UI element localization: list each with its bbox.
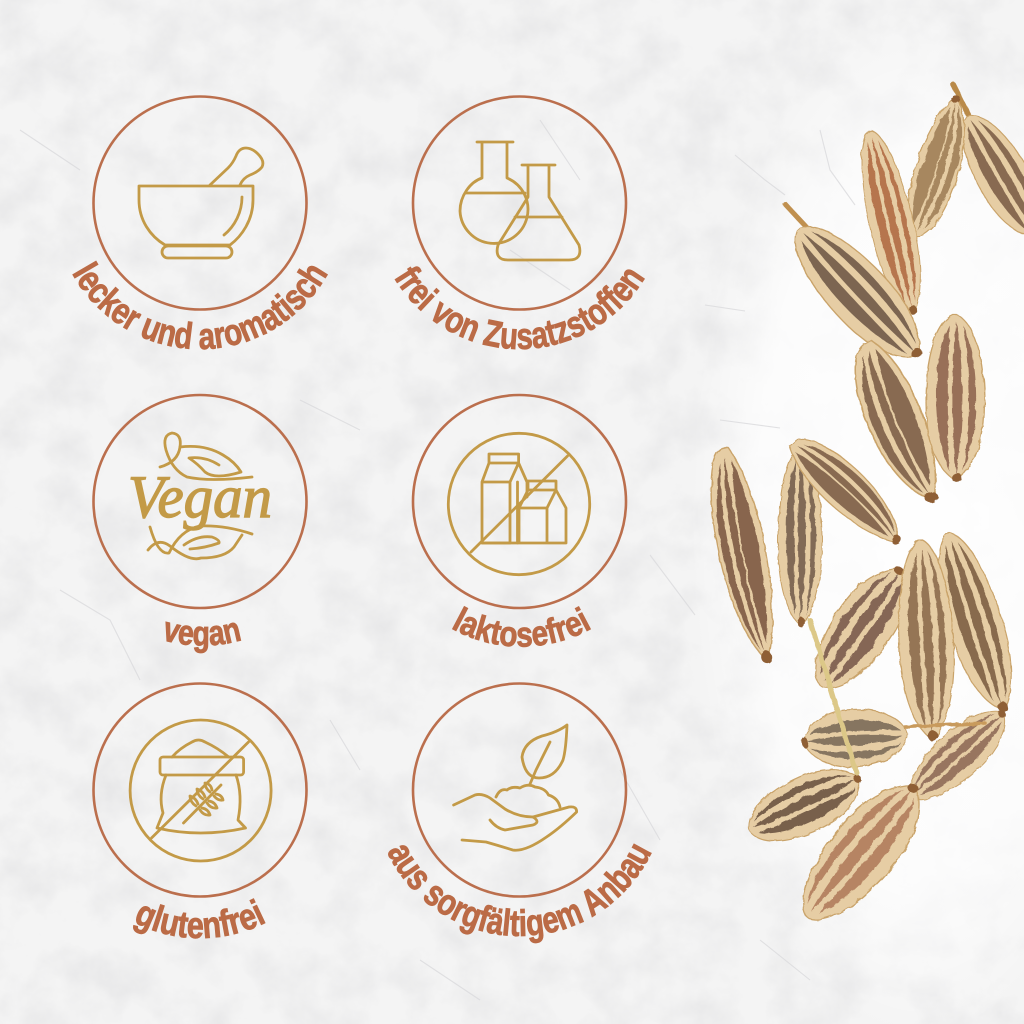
badge: aus sorgfaeltigem Anbau <box>388 682 652 944</box>
illustration: caraway seeds <box>692 84 1024 938</box>
badge: laktosefrei <box>412 394 628 648</box>
seed: middle lower <box>833 335 963 512</box>
label: aus sorgfältigem Anbau <box>388 843 652 944</box>
icon: hand holding seedling <box>454 725 577 850</box>
seed: tall right front <box>894 539 958 743</box>
badge: lecker und aromatisch <box>72 95 328 350</box>
seed: top right <box>946 104 1024 251</box>
label: glutenfrei <box>133 898 266 939</box>
seed: bottom large <box>782 765 942 938</box>
icon: mortar and pestle <box>139 148 263 258</box>
icon: crossed-out flour sack <box>130 720 271 861</box>
circle outline <box>413 395 626 608</box>
icon: vegan lettering with leaves <box>128 433 272 559</box>
badge: frei von Zusatzstoffen <box>394 95 645 350</box>
icon: laboratory flasks <box>460 142 580 260</box>
leaf flourishes <box>148 433 252 559</box>
label: lecker und aromatisch <box>72 260 328 350</box>
seed: upright <box>926 315 984 482</box>
badge: vegan <box>92 394 308 654</box>
seed: centre <box>797 552 927 703</box>
label: vegan <box>165 621 242 654</box>
seed: far left <box>692 445 795 668</box>
label: laktosefrei <box>452 606 591 648</box>
seed: reddish <box>849 126 934 320</box>
icon: crossed-out milk cartons <box>448 433 590 575</box>
circle outline <box>413 96 626 310</box>
circle outline <box>94 96 306 310</box>
seed: lower right <box>896 695 1021 814</box>
seed: upright beside stalk <box>778 448 822 627</box>
label: frei von Zusatzstoffen <box>394 266 645 350</box>
vegan script word: Vegan <box>128 464 272 530</box>
seed: lower left <box>738 754 873 856</box>
seed: tall right back <box>923 526 1024 720</box>
seed: curved <box>782 422 913 561</box>
seed stalks <box>785 84 970 231</box>
seed: with stalk <box>776 208 941 379</box>
circle outline <box>413 684 626 896</box>
circle outline <box>94 684 306 896</box>
seed: small horizontal <box>800 707 909 769</box>
seed: curved pale <box>901 90 974 242</box>
circle outline <box>94 395 306 608</box>
badge: glutenfrei <box>92 682 308 939</box>
long stalks <box>810 620 985 772</box>
